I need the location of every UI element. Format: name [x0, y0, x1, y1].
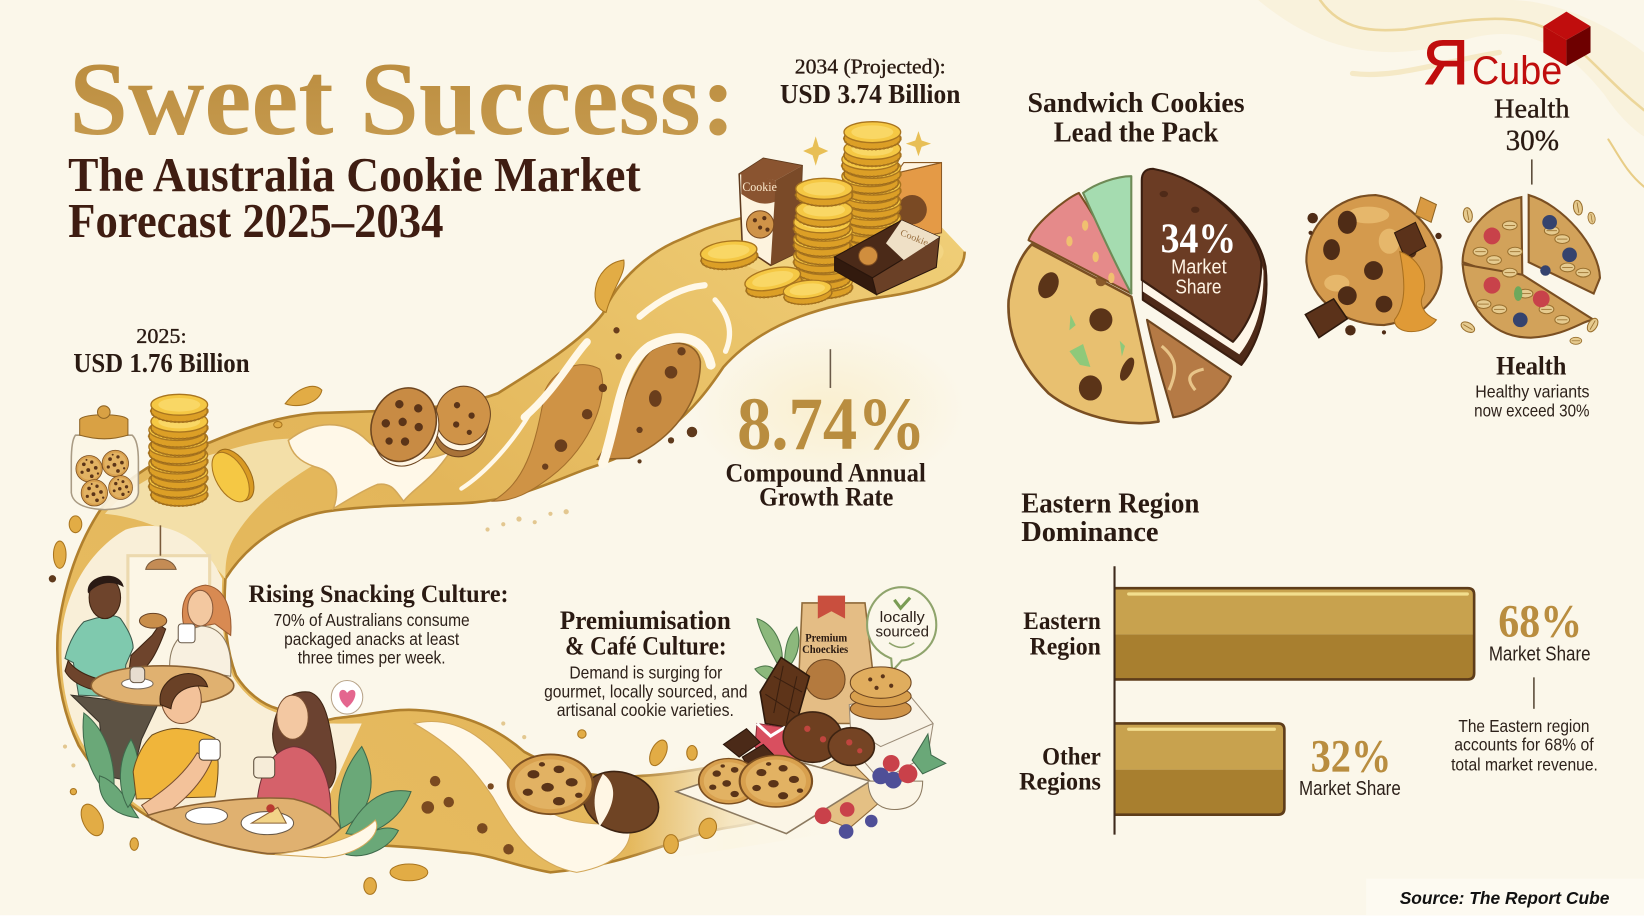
golden cookie-dough flow ribbon [49, 208, 965, 894]
driver text: snacking [248, 581, 509, 668]
locally sourced badge: sourced [875, 624, 929, 640]
body line 2: packaged anacks at least [284, 629, 459, 649]
share caption 1: Market [1171, 257, 1227, 279]
heading line 2: Dominance [1021, 517, 1159, 548]
caption line 2: now exceed 30% [1474, 400, 1590, 420]
wooden board and berries [797, 755, 886, 828]
bar chart: Market Share [1489, 644, 1591, 666]
heading line 1: Eastern Region [1021, 489, 1200, 520]
middle coin stack [794, 178, 852, 298]
pendant lamp [146, 525, 176, 569]
wordmark: Cube [1472, 49, 1562, 93]
loose berries [815, 802, 878, 839]
subtitle line 1: The Australia Cookie Market [68, 149, 641, 202]
cookie illustration: oat with slice [1459, 195, 1600, 344]
table cup [122, 667, 153, 689]
slice: green [1083, 176, 1131, 294]
panel: eastern region [1019, 489, 1598, 835]
dark chocolate box: Cookie [898, 228, 929, 249]
chocolate bar [755, 657, 809, 765]
berry bowl [868, 734, 946, 809]
slice: chocolate base [1143, 170, 1266, 365]
premium food group [676, 587, 946, 839]
heading line 1: Sandwich Cookies [1027, 88, 1245, 119]
gold splashes [53, 260, 720, 894]
heading line 2: & Café Culture: [565, 631, 727, 660]
person: green shirt [65, 576, 167, 781]
plate with cookies [676, 755, 870, 834]
year: 2025: [136, 324, 187, 348]
cookie: lower flow [508, 754, 593, 814]
CAGR callout [726, 349, 926, 511]
locally sourced badge [867, 587, 936, 671]
plant left [83, 713, 139, 818]
person: orange hair [170, 585, 231, 676]
cafe scene [61, 525, 411, 856]
paper bag [797, 596, 879, 723]
body line 1: 70% of Australians consume [274, 610, 470, 630]
chocolate cookies [783, 712, 874, 765]
flat coins [699, 238, 833, 307]
heading line 1: Premiumisation [560, 606, 731, 635]
bar: eastern [1115, 588, 1474, 679]
cafe table [91, 666, 234, 706]
cookie box: Cookie [742, 180, 777, 194]
value: USD 3.74 Billion [780, 79, 960, 109]
leaves [755, 619, 799, 687]
source note [1366, 879, 1644, 915]
value: 68: 68% [1498, 595, 1582, 646]
leaning coin [204, 443, 262, 509]
slice: pink [1029, 193, 1131, 294]
milk trail near plant [275, 820, 377, 858]
dough band: right cookie [598, 343, 700, 459]
share caption 2: Share [1175, 277, 1221, 299]
heading line 2: Lead the Pack [1054, 118, 1219, 149]
chocolate piece [1305, 299, 1347, 338]
health callout [1474, 93, 1590, 420]
plant right [339, 747, 411, 856]
bar chart: Regions [1019, 769, 1101, 796]
body line 1: Demand is surging for [569, 662, 722, 682]
CAGR number: 8.74% [737, 383, 926, 466]
bar chart: Region [1030, 633, 1101, 660]
title block [68, 41, 736, 248]
scene backdrop [61, 526, 362, 849]
source note: Source: The Report Cube [1400, 888, 1609, 908]
caption heading: Health [1496, 351, 1567, 380]
window [128, 556, 210, 671]
note: total market revenue. [1451, 755, 1598, 775]
person: yellow shirt [133, 674, 220, 820]
cookie pie chart [1008, 169, 1266, 423]
paper bag: Choeckies [802, 644, 849, 656]
share figure: 34% [1161, 217, 1236, 263]
front table with cake [147, 798, 341, 854]
jar of cookies [71, 406, 138, 510]
chocolate chunk [1394, 222, 1426, 258]
locally sourced badge: locally [880, 610, 925, 626]
note: The Eastern region [1458, 716, 1589, 736]
note: accounts for 68% of [1454, 735, 1594, 755]
dark chocolate box [835, 220, 939, 295]
fruit pieces [1484, 215, 1577, 327]
connector line [829, 349, 831, 388]
heading: Rising Snacking Culture: [248, 581, 509, 608]
axis [1114, 566, 1116, 835]
pale fade at the right tail of lower ribbon [629, 734, 828, 865]
milk and dough swirl: lower wave [275, 721, 667, 872]
sandwich cookies [358, 377, 497, 477]
CAGR caption line 1: Compound Annual [726, 458, 926, 487]
driver text: premiumisation [544, 606, 748, 720]
caption line 1: Healthy variants [1475, 381, 1590, 401]
decorative swirl: top right [1258, 0, 1644, 187]
label: other: Other [1042, 743, 1101, 770]
heart speech bubble [331, 681, 363, 714]
cookie: chocolate half [574, 761, 667, 843]
milk strands [461, 285, 730, 489]
main ribbon shape [57, 208, 965, 872]
dough band: left [493, 365, 603, 501]
cube [1543, 12, 1591, 66]
slice: cream layer [1143, 173, 1263, 354]
value: USD 1.76 Billion [73, 348, 250, 378]
connector [1531, 159, 1533, 185]
pale band on left of ribbon [105, 439, 336, 579]
connector [1533, 677, 1535, 709]
mark: Я [1423, 28, 1469, 98]
body line 3: three times per week. [298, 648, 446, 668]
year: 2034 (Projected): [795, 54, 946, 78]
paper bag: Premium [805, 633, 848, 645]
slice: plain cookie [1008, 244, 1159, 423]
subtitle line 2: Forecast 2025–2034 [68, 195, 444, 248]
slice: caramel [1147, 320, 1231, 417]
value label 2025 [73, 324, 250, 378]
white box with stacked cookies [849, 667, 933, 781]
bar chart [1019, 566, 1591, 835]
coin stack: 2034 group [699, 122, 944, 307]
orange product box [896, 163, 942, 241]
body line 2: gourmet, locally sourced, and [544, 681, 748, 701]
chips in ribbon [542, 327, 686, 470]
bar: other [1115, 723, 1284, 815]
body line 3: artisanal cookie varieties. [557, 700, 734, 720]
health value: 30% [1506, 125, 1559, 157]
bar chart: Market Share [1299, 778, 1401, 800]
label: eastern: Eastern [1023, 608, 1101, 635]
slice: chocolate top [1142, 169, 1261, 342]
panel: sandwich cookies [1008, 88, 1266, 423]
cookie illustration: chocolate [1305, 195, 1442, 338]
milk pool [288, 425, 451, 509]
CAGR caption line 2: Growth Rate [759, 482, 893, 511]
oat flakes [1459, 200, 1600, 344]
value: 32: 32% [1311, 731, 1391, 782]
speckled crumbs [63, 509, 569, 768]
value label 2034 [780, 54, 960, 109]
note [1451, 716, 1598, 775]
health label: Health [1494, 93, 1570, 123]
title: sweet success: Sweet Success: [69, 41, 736, 157]
cookie box [739, 158, 802, 265]
sparkles [803, 131, 931, 166]
glow behind CAGR [692, 325, 965, 493]
logo: RCube [1423, 12, 1591, 98]
chocolate chunks [723, 729, 774, 771]
coin stack: 2025 group [149, 394, 262, 509]
gold platform highlight [734, 222, 944, 281]
tall coin stack [842, 122, 901, 269]
caramel drip [1394, 252, 1436, 332]
person: pink top [254, 692, 336, 823]
